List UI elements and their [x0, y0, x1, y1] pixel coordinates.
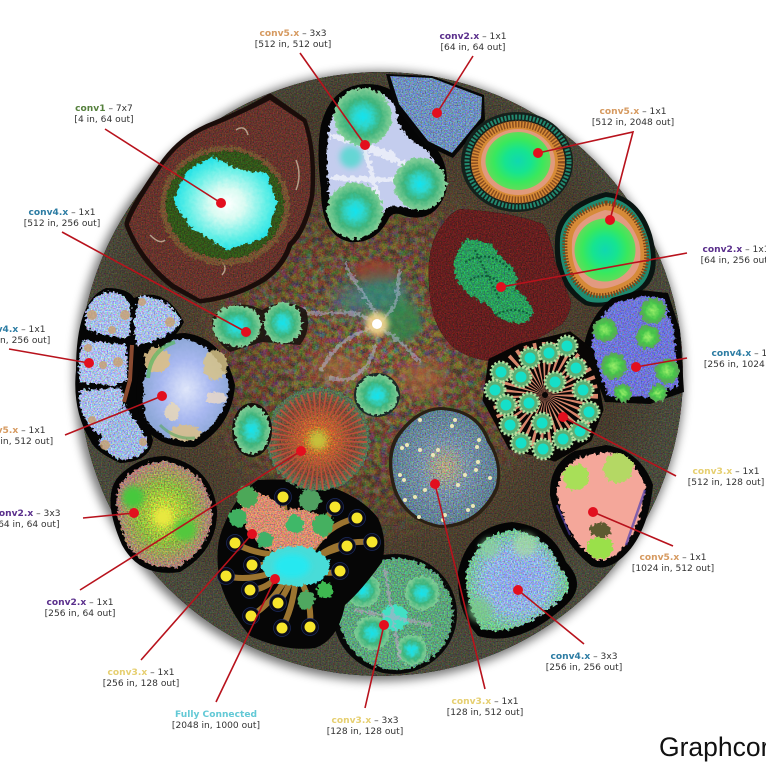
cell: conv5.x 1x1 centre-left [137, 333, 235, 447]
label: conv3.x 1x1 bottom: [128 in, 512 out] [447, 708, 523, 718]
label: conv2.x 1x1 bottom left: [256 in, 64 out] [45, 609, 115, 619]
cell: conv2.x 1x1 orange spiky [266, 387, 370, 491]
label: conv5.x 1x1 bottom right: conv5.x – 1x1 [640, 553, 706, 563]
cell: conv2.x 1x1 triangle [386, 74, 485, 158]
label: fully connected: Fully Connected [175, 710, 257, 720]
label: conv4.x 3x3: conv4.x – 3x3 [551, 652, 617, 662]
label: conv5.x 1x1 top right: [512 in, 2048 out] [592, 118, 674, 128]
cell: conv1 7x7 [126, 95, 314, 302]
label: conv3.x 1x1 bottom: conv3.x – 1x1 [452, 697, 518, 707]
cell: conv2.x 3x3 [110, 456, 217, 573]
cell: conv5.x 1x1 ring [461, 112, 573, 212]
centre swirl [203, 194, 548, 536]
label: conv5.x 1x1 bottom right: [1024 in, 512 out] [632, 564, 714, 574]
cell: conv4.x 3x3 [458, 522, 577, 639]
cell: conv3.x 3x3 [333, 554, 457, 674]
cell: conv5.x 1x1 ring 2 [555, 192, 656, 307]
cell: conv3.x 1x1 grey blob [389, 407, 500, 528]
cell: small teal lower left [232, 403, 272, 457]
label: conv2.x 1x1 top: [64 in, 64 out] [441, 43, 505, 53]
radial network disc [74, 71, 684, 681]
label: conv4.x 3x3: [256 in, 256 out] [546, 663, 622, 673]
label: conv2.x 1x1 top: conv2.x – 1x1 [440, 32, 506, 42]
cell: small teal centre [354, 373, 400, 417]
label: conv3.x 3x3: conv3.x – 3x3 [332, 716, 398, 726]
label: conv5.x 3x3: conv5.x – 3x3 [260, 29, 326, 39]
cell: conv4.x 1x1 left [75, 288, 184, 463]
cell: conv2.x 1x1 red [429, 209, 571, 361]
cell: fully connected [217, 480, 384, 649]
label: conv3.x 1x1 right: [512 in, 128 out] [688, 478, 764, 488]
label: conv1: conv1 – 7x7 [75, 104, 133, 114]
label: conv5.x 1x1 top right: conv5.x – 1x1 [600, 107, 666, 117]
cell: conv5.x 3x3 [318, 84, 447, 242]
cell: conv4.x 1x1 right [584, 290, 684, 404]
label: conv3.x 1x1 bottom left: [256 in, 128 out] [103, 679, 179, 689]
label: conv4.x 1x1 upper left: conv4.x – 1x1 [29, 208, 95, 218]
label: fully connected: [2048 in, 1000 out] [172, 721, 260, 731]
cell: conv3.x 1x1 flower [484, 333, 602, 460]
leader lines and dots [9, 53, 687, 708]
label: conv3.x 3x3: [128 in, 128 out] [327, 727, 403, 737]
label: conv2.x 1x1 bottom left: conv2.x – 1x1 [47, 598, 113, 608]
cell: small teal pair [212, 302, 308, 352]
label: conv4.x 1x1 upper left: [512 in, 256 out] [24, 219, 100, 229]
label: conv3.x 1x1 right: conv3.x – 1x1 [693, 467, 759, 477]
label: conv5.x 3x3: [512 in, 512 out] [255, 40, 331, 50]
label: conv3.x 1x1 bottom left: conv3.x – 1x1 [108, 668, 174, 678]
label: conv1: [4 in, 64 out] [74, 115, 134, 125]
cell: conv5.x 1x1 pink [551, 446, 652, 567]
